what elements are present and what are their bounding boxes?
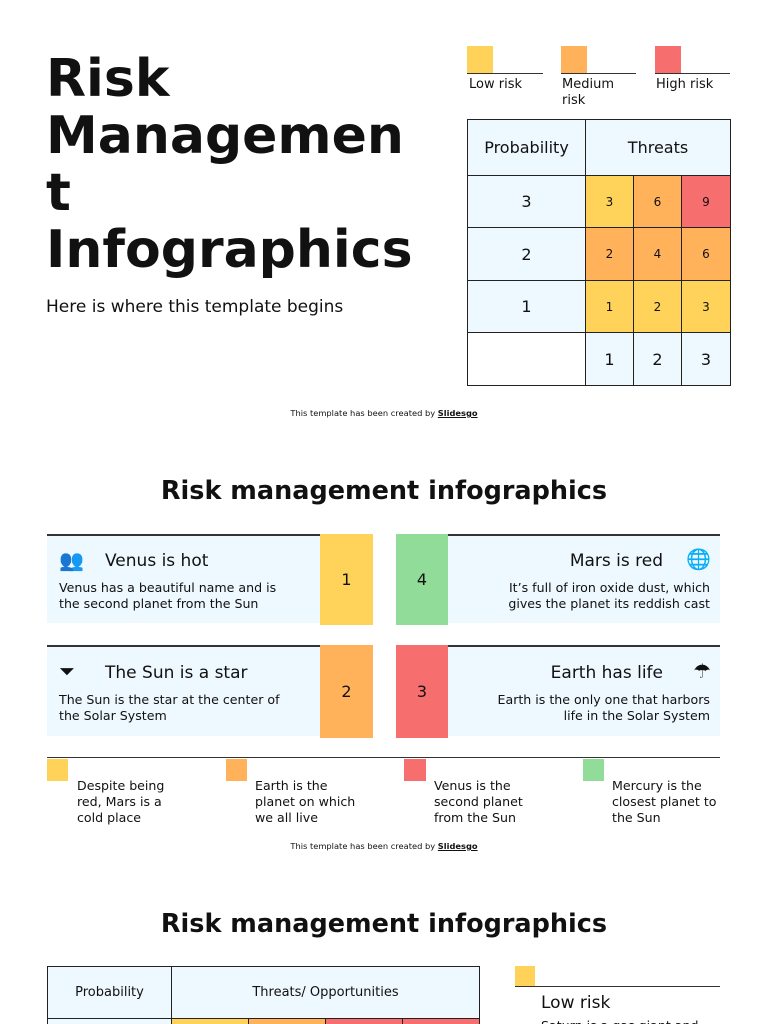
risk matrix table: 9 xyxy=(702,194,710,208)
bottom legend row: red, Mars is a xyxy=(77,794,162,809)
icon: umbrella: ☂ xyxy=(693,659,711,683)
card: The Sun is a star: The Sun is the star at the center of xyxy=(59,692,280,707)
bottom table xyxy=(47,966,480,1024)
icon: funnel: ⏷ xyxy=(59,659,75,683)
title xyxy=(46,49,413,280)
card: Mars is red: It’s full of iron oxide dust, which xyxy=(509,580,710,595)
risk matrix table xyxy=(467,119,731,386)
risk matrix table: 2 xyxy=(606,247,613,261)
risk matrix table: 2 xyxy=(521,244,532,264)
bottom table: Threats/ Opportunities xyxy=(252,985,399,1000)
card: The Sun is a star: The Sun is a star xyxy=(105,663,248,683)
bottom legend row: from the Sun xyxy=(434,810,516,825)
bottom legend row: planet on which xyxy=(255,794,355,809)
card: Venus is hot: Venus has a beautiful name and is xyxy=(59,580,276,595)
bottom legend row xyxy=(47,757,720,827)
risk matrix table: 4 xyxy=(654,247,661,261)
bottom legend row: closest planet to xyxy=(612,794,716,809)
legend: risk levels: risk xyxy=(562,93,585,108)
heading 3: Risk management infographics xyxy=(161,909,607,939)
risk matrix table: 1 xyxy=(604,350,615,368)
bottom legend row: Mercury is the xyxy=(612,778,702,793)
legend: risk levels xyxy=(467,46,730,108)
bottom legend row: second planet xyxy=(434,794,523,809)
card: Earth has life: Earth is the only one that harbors xyxy=(498,692,710,707)
bottom legend row: the Sun xyxy=(612,810,661,825)
risk matrix table: 2 xyxy=(652,350,663,368)
card: Mars is red: Mars is red xyxy=(570,551,663,571)
bottom legend row: Earth is the xyxy=(255,778,328,793)
low risk legend xyxy=(515,966,720,1024)
card: Venus is hot: Venus is hot xyxy=(105,551,208,571)
risk matrix table: 3 xyxy=(702,300,710,314)
title: Infographics xyxy=(46,220,413,280)
icon: people: 👥 xyxy=(59,548,84,572)
risk matrix table: 6 xyxy=(702,247,710,261)
risk matrix table: 3 xyxy=(701,350,711,368)
bottom legend row: we all live xyxy=(255,810,318,825)
card: Mars is red xyxy=(396,534,720,623)
title: Managemen xyxy=(46,106,404,166)
card: Earth has life xyxy=(396,645,720,736)
subtitle: Here is where this template begins xyxy=(46,297,343,317)
credit: This template has been created by Slidesgo xyxy=(290,408,478,418)
risk matrix table: Probability xyxy=(484,138,569,157)
card: Earth has life: life in the Solar System xyxy=(564,708,710,723)
bottom table: Probability xyxy=(75,985,144,1000)
legend: risk levels: Medium xyxy=(562,77,614,92)
bottom legend row: Despite being xyxy=(77,778,164,793)
risk matrix table: 1 xyxy=(606,300,613,314)
bottom legend row: Venus is the xyxy=(434,778,511,793)
card: Mars is red: gives the planet its reddish cast xyxy=(508,596,710,611)
risk matrix table: 2 xyxy=(654,300,661,314)
card: Venus is hot xyxy=(47,534,373,623)
title: Risk xyxy=(46,49,169,109)
risk matrix table: 6 xyxy=(654,194,661,208)
card: Venus is hot: the second planet from the Sun xyxy=(59,596,258,611)
low risk legend: Low risk xyxy=(541,993,610,1013)
card: Venus is hot: 1 xyxy=(341,570,352,589)
card: Earth has life: 3 xyxy=(417,682,427,701)
card: The Sun is a star: 2 xyxy=(341,682,352,701)
risk matrix table: 3 xyxy=(606,194,613,208)
card: Mars is red: 4 xyxy=(417,570,427,589)
risk matrix table: Threats xyxy=(628,138,688,157)
credit: This template has been created by Slidesgo xyxy=(290,841,478,851)
risk matrix table: 1 xyxy=(521,297,532,316)
heading 2: Risk management infographics xyxy=(161,476,607,506)
legend: risk levels: Low risk xyxy=(469,77,522,92)
risk matrix table: 3 xyxy=(521,192,532,211)
card: The Sun is a star: the Solar System xyxy=(59,708,167,723)
legend: risk levels: High risk xyxy=(656,77,713,92)
card: Earth has life: Earth has life xyxy=(551,663,663,683)
title: t xyxy=(46,163,71,223)
icon: globe: 🌐 xyxy=(686,547,711,571)
bottom legend row: cold place xyxy=(77,810,141,825)
card: The Sun is a star xyxy=(47,645,373,736)
